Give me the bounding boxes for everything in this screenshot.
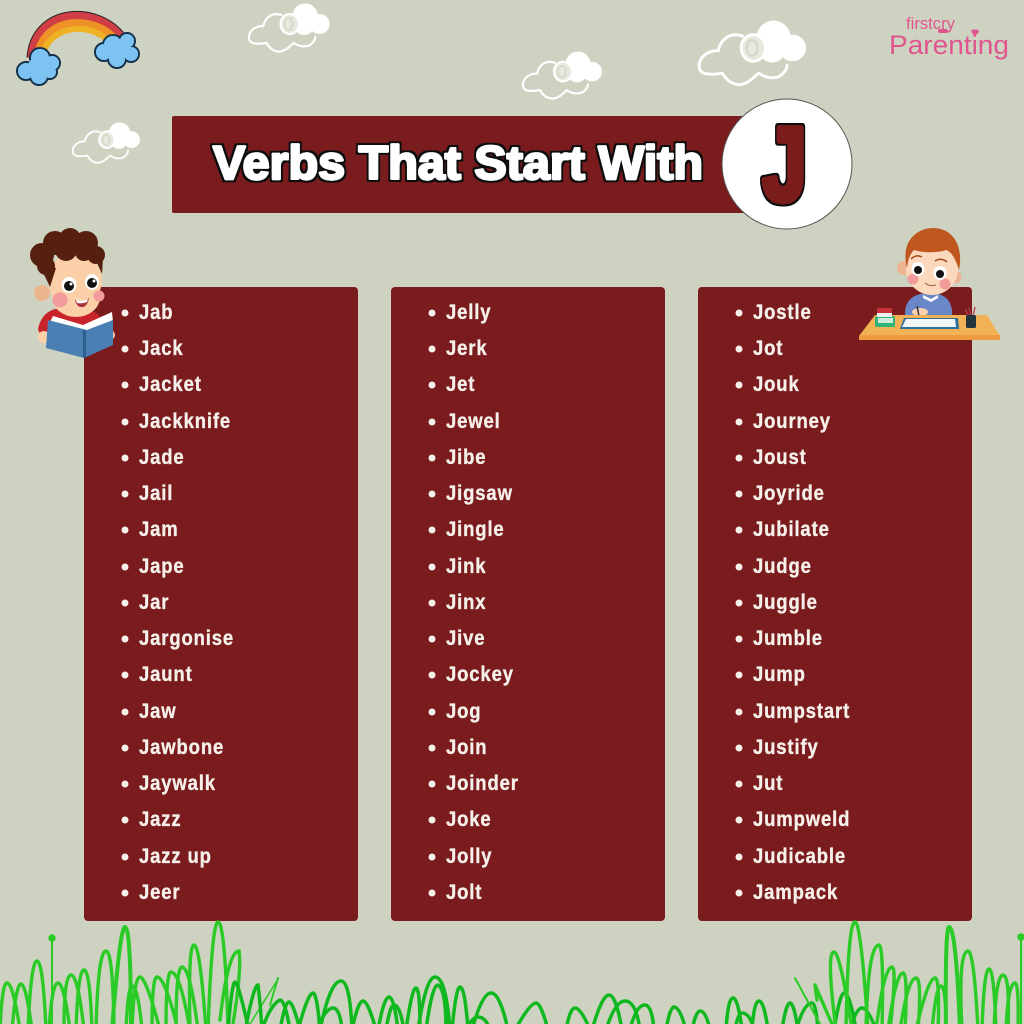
word list: second column	[446, 301, 519, 904]
illustration: boy reading a book	[30, 228, 115, 358]
word list: first column: Jail	[139, 482, 173, 505]
grass: left clump	[0, 922, 278, 1024]
word list: third column: Jot	[753, 337, 783, 360]
logo: FirstCry Parenting: firstcry	[906, 14, 955, 33]
panel: first word column	[84, 287, 358, 921]
word list: second column: Jolt	[446, 881, 482, 904]
word list: first column: Jar	[139, 591, 169, 614]
word list: third column: Jut	[753, 772, 783, 795]
word list: second column: Joke	[446, 808, 492, 831]
letter badge J: J	[763, 107, 806, 223]
word list: first column: Jawbone	[139, 736, 224, 759]
letter badge J	[722, 99, 852, 229]
word list: first column: Jackknife	[139, 410, 231, 433]
word list: first column: Jaywalk	[139, 772, 216, 795]
title text: Verbs That Start With	[213, 136, 703, 189]
word list: first column	[139, 301, 234, 904]
panel: second word column	[391, 287, 665, 921]
word list: third column: Judicable	[753, 845, 846, 868]
word list: third column	[753, 301, 850, 904]
icon: rainbow with blue clouds	[17, 19, 139, 85]
panel: third word column	[698, 287, 972, 921]
word list: second column: Jigsaw	[446, 482, 513, 505]
word list: second column: Jog	[446, 700, 481, 723]
cloud: top centre-right	[523, 52, 602, 99]
word list: first column: Jeer	[139, 881, 180, 904]
word list: first column: Jargonise	[139, 627, 234, 650]
word list: first column: Jazz	[139, 808, 181, 831]
illustration: boy writing at a desk	[859, 228, 1000, 340]
word list: first column: Jaunt	[139, 663, 193, 686]
word list: first column: Jack	[139, 337, 184, 360]
word list: third column: Judge	[753, 555, 812, 578]
word list: second column: Jibe	[446, 446, 486, 469]
word list: third column: Jouk	[753, 373, 800, 396]
word list: first column: Jaw	[139, 700, 177, 723]
title banner	[172, 116, 762, 213]
word list: second column: Jockey	[446, 663, 514, 686]
word list: first column: Jade	[139, 446, 185, 469]
word list: third column: Joyride	[753, 482, 825, 505]
word list: third column: Juggle	[753, 591, 818, 614]
logo: FirstCry Parenting: Parenting	[889, 30, 1009, 60]
word list: second column: Jolly	[446, 845, 492, 868]
word list: third column: Journey	[753, 410, 831, 433]
word list: third column: Jumble	[753, 627, 823, 650]
word list: second column: Jinx	[446, 591, 486, 614]
word list: first column: Jape	[139, 555, 185, 578]
word list: third column: Jampack	[753, 881, 838, 904]
bullets: third column	[736, 310, 742, 896]
word list: second column: Join	[446, 736, 487, 759]
grass: middle band	[228, 977, 876, 1024]
word list: second column: Jingle	[446, 518, 505, 541]
word list: third column: Justify	[753, 736, 819, 759]
cloud: top right	[699, 21, 805, 85]
cloud: left of title	[73, 123, 140, 163]
word list: second column: Jet	[446, 373, 475, 396]
word list: third column: Jubilate	[753, 518, 830, 541]
word list: first column: Jab	[139, 301, 173, 324]
word list: second column: Joinder	[446, 772, 519, 795]
word list: third column: Jumpweld	[753, 808, 850, 831]
bullets: second column	[428, 310, 436, 896]
word list: second column: Jink	[446, 555, 486, 578]
word list: first column: Jacket	[139, 373, 202, 396]
logo: FirstCry Parenting	[889, 14, 1009, 60]
word list: second column: Jerk	[446, 337, 487, 360]
word list: first column: Jam	[139, 518, 179, 541]
word list: first column: Jazz up	[139, 845, 212, 868]
word list: third column: Jumpstart	[753, 700, 850, 723]
word list: third column: Jostle	[753, 301, 812, 324]
word list: second column: Jive	[446, 627, 485, 650]
word list: third column: Joust	[753, 446, 807, 469]
word list: second column: Jelly	[446, 301, 491, 324]
word list: third column: Jump	[753, 663, 806, 686]
bullets: first column	[122, 310, 128, 896]
grass: right clump	[795, 922, 1023, 1024]
word list: second column: Jewel	[446, 410, 501, 433]
cloud: top centre-left	[249, 4, 329, 52]
